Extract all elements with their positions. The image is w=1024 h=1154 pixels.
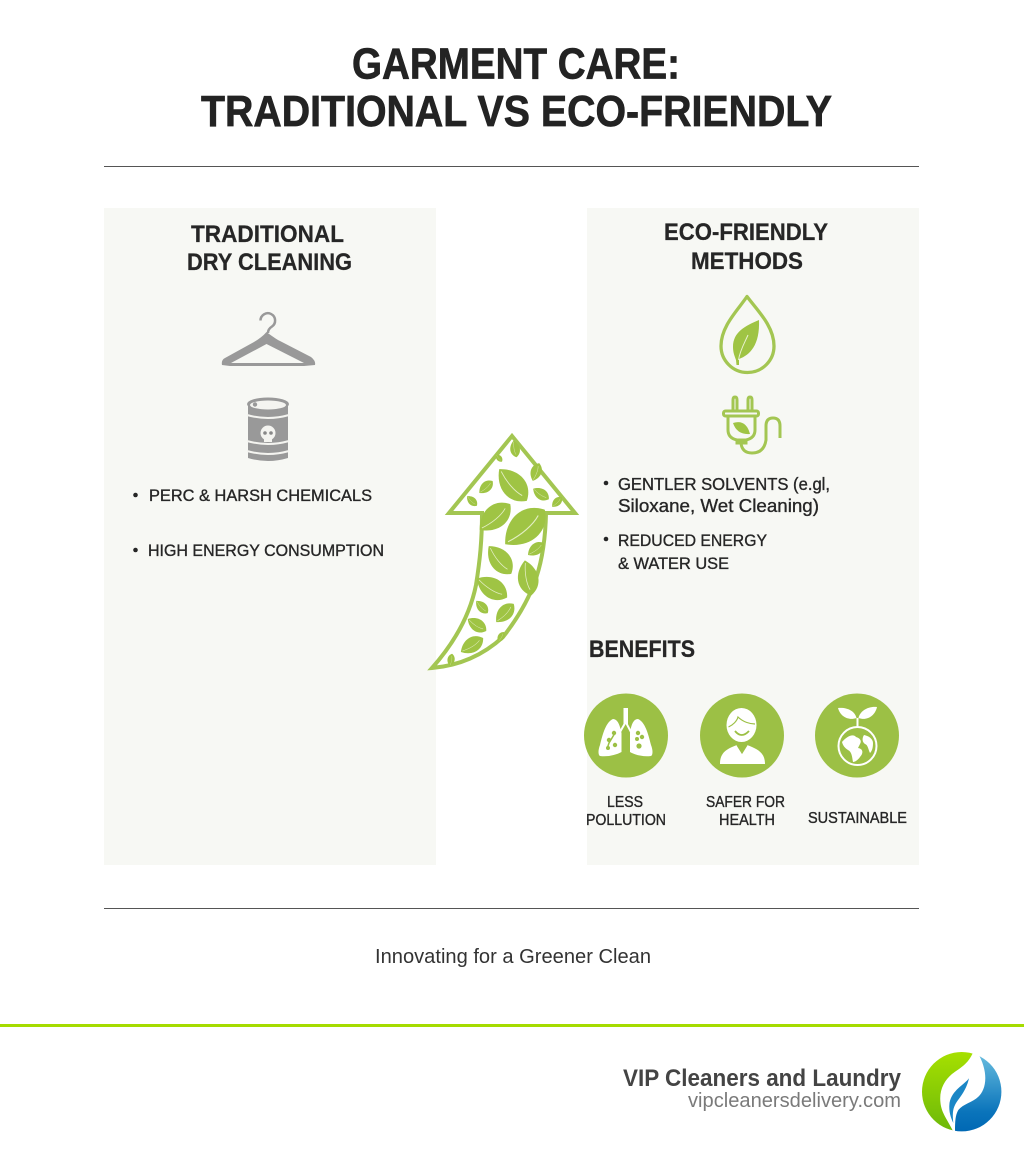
title <box>201 40 832 136</box>
bullet list: eco-friendly methods: REDUCED ENERGY <box>618 531 767 550</box>
benefit: less pollution: POLLUTION <box>586 812 666 829</box>
bullet list: traditional drawbacks <box>133 486 384 560</box>
logo: leaf and flame circle <box>922 1052 1002 1132</box>
benefit: sustainable <box>808 694 907 827</box>
bullet list: traditional drawbacks: HIGH ENERGY CONSUMPTION <box>148 541 384 560</box>
icon: clothes hanger <box>222 313 315 366</box>
footer brand text: VIP Cleaners and Laundry <box>623 1065 902 1092</box>
heading: traditional dry cleaning <box>187 221 352 276</box>
icon: toxic barrel <box>247 398 289 461</box>
icon: water drop with leaf <box>721 296 774 373</box>
panel: traditional dry cleaning <box>104 208 436 865</box>
arrow: leaf-filled transition arrow <box>432 436 575 668</box>
heading: eco-friendly methods <box>664 219 828 275</box>
benefit: safer for health: HEALTH <box>719 812 775 829</box>
benefit: sustainable: SUSTAINABLE <box>808 810 907 827</box>
heading: traditional dry cleaning: TRADITIONAL <box>191 221 344 248</box>
benefit: less pollution <box>584 694 668 829</box>
heading: eco-friendly methods: ECO-FRIENDLY <box>664 219 828 246</box>
icon: plug with leaf <box>724 397 780 453</box>
heading: benefits: BENEFITS <box>589 636 695 663</box>
tagline: Innovating for a Greener Clean <box>375 946 651 968</box>
title: GARMENT CARE: <box>352 40 680 88</box>
heading: eco-friendly methods: METHODS <box>691 248 803 275</box>
bullet list: eco-friendly methods: & WATER USE <box>618 554 729 573</box>
footer brand text <box>623 1065 902 1112</box>
footer brand text: vipcleanersdelivery.com <box>688 1090 901 1112</box>
bullet list: eco-friendly methods: Siloxane, Wet Cleaning) <box>618 495 819 516</box>
bullet list: traditional drawbacks: PERC & HARSH CHEMICALS <box>149 486 372 505</box>
bullet list: eco-friendly methods <box>604 474 830 573</box>
footer divider bar <box>0 1024 1024 1027</box>
panel: eco-friendly methods <box>584 208 919 865</box>
benefit: safer for health: SAFER FOR <box>706 794 785 811</box>
heading: traditional dry cleaning: DRY CLEANING <box>187 249 352 276</box>
bullet list: eco-friendly methods: GENTLER SOLVENTS (e.gl, <box>618 474 830 494</box>
benefit: less pollution: LESS <box>607 794 643 811</box>
title: TRADITIONAL VS ECO-FRIENDLY <box>201 87 832 136</box>
benefit: safer for health <box>700 694 785 829</box>
